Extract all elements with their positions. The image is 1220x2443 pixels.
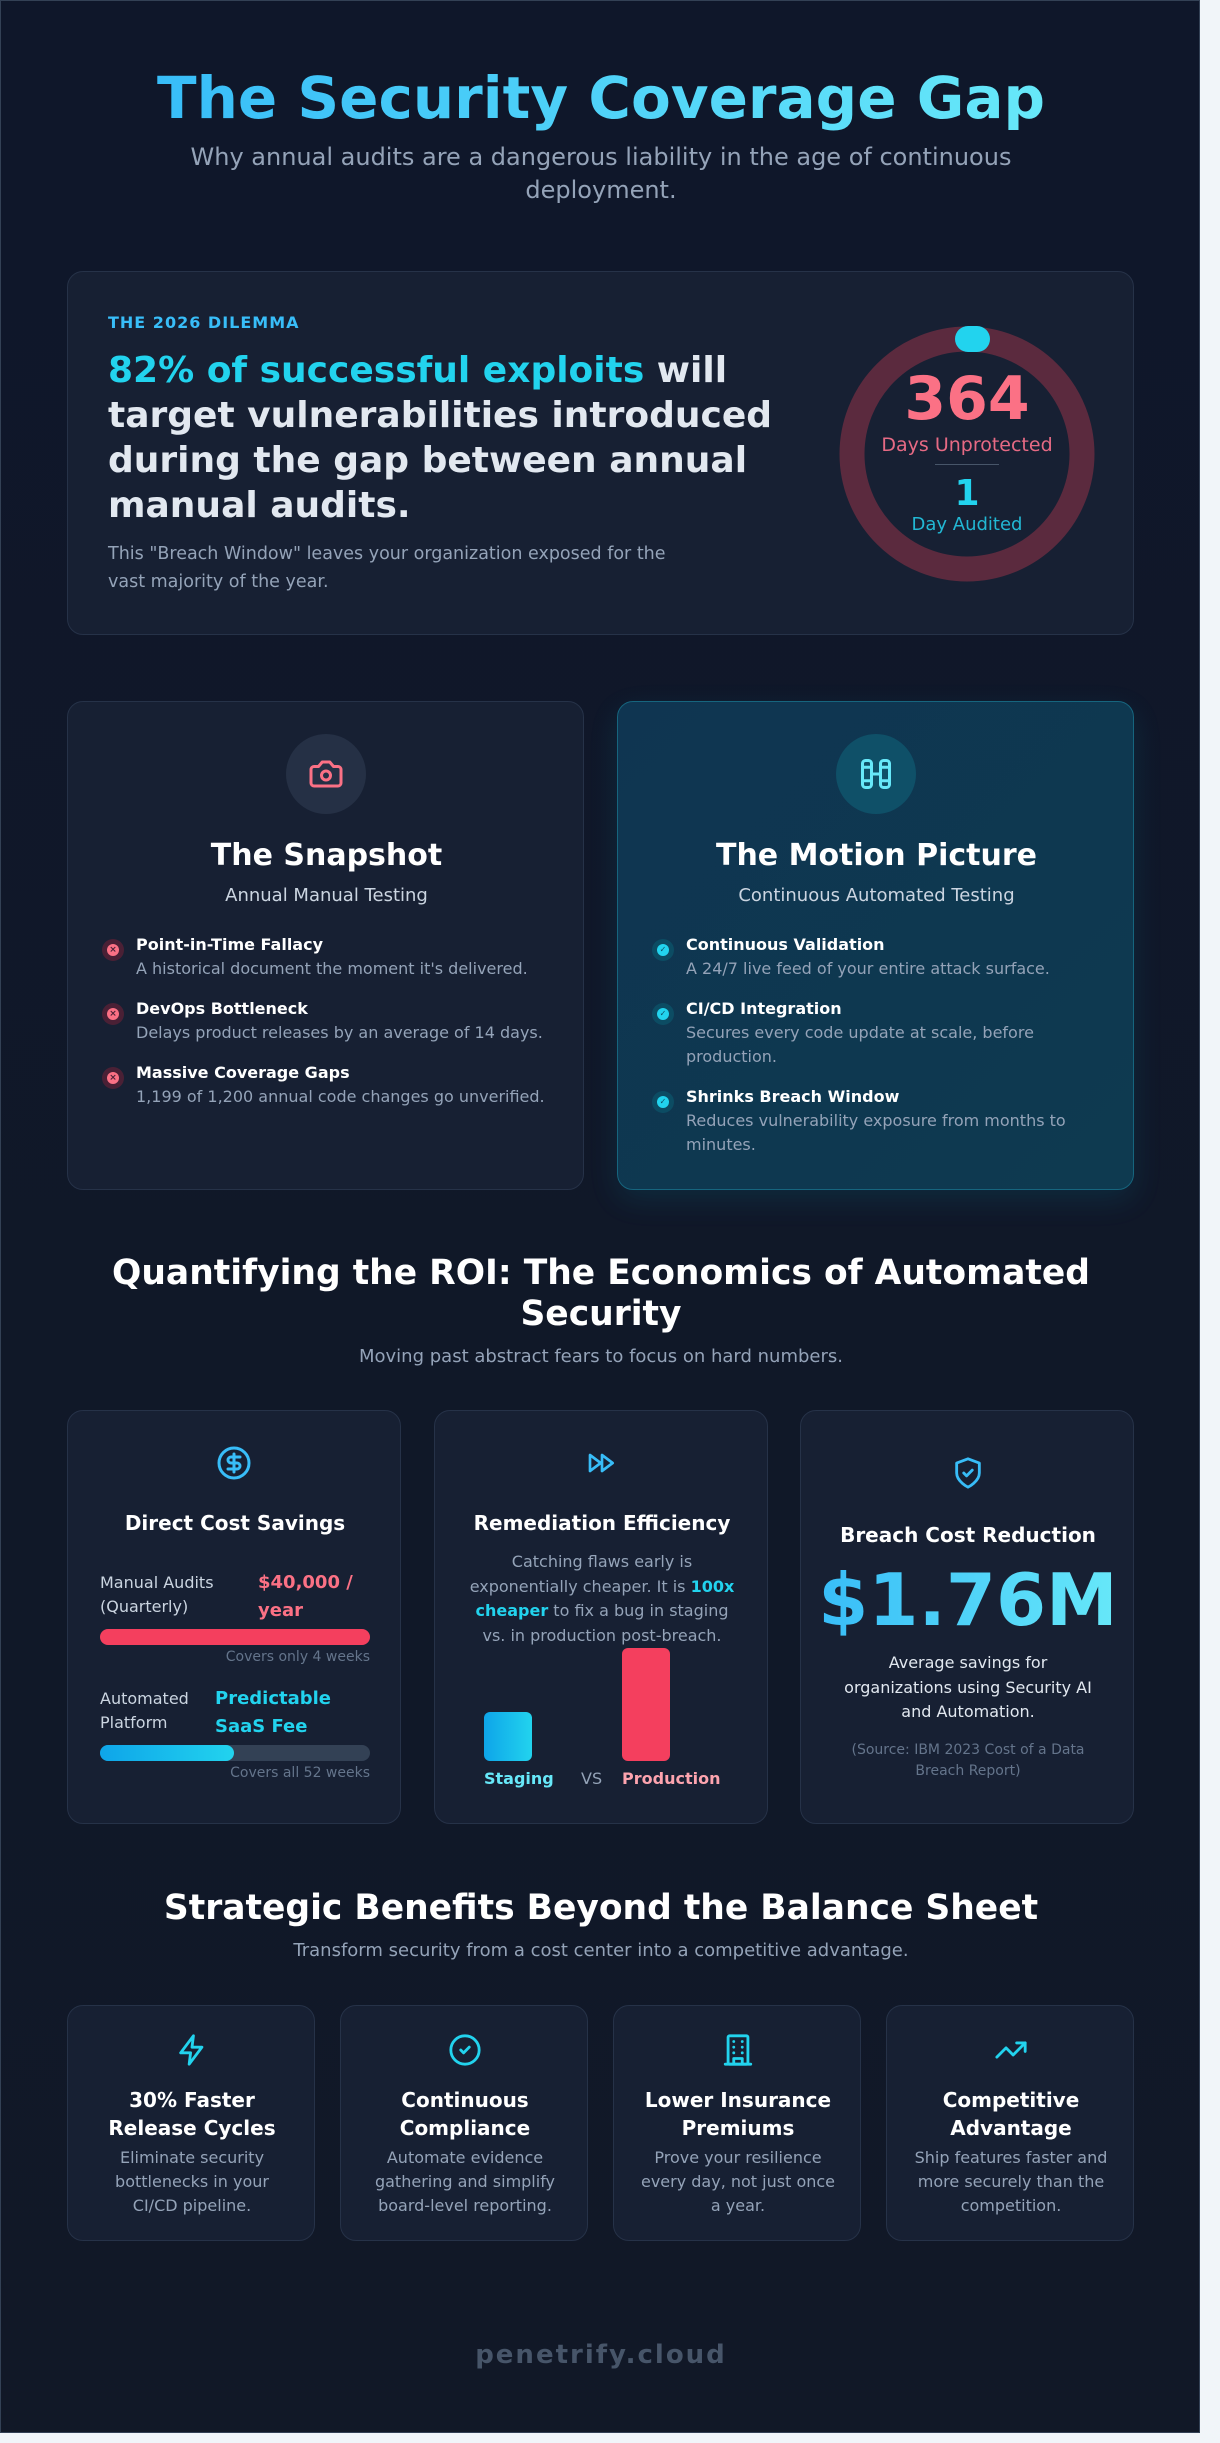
row: automated platform: [100, 1688, 370, 1781]
item 3: Reduces vulnerability exposure from months to minutes.: [686, 1111, 1066, 1154]
label production: Production: [622, 1769, 720, 1788]
eyebrow label: THE 2026 DILEMMA: [108, 313, 300, 332]
item 2: [102, 999, 543, 1042]
item 1: ×: [109, 945, 117, 955]
icon: film: [836, 734, 916, 814]
body text: This "Breach Window" leaves your organization exposed for the vast majority of the year.: [108, 544, 666, 592]
title: Lower Insurance Premiums: [645, 2088, 831, 2140]
icon: shield check: [955, 1457, 981, 1489]
icon: check circle: [449, 2034, 481, 2066]
row: manual audits: $40,000 / year: [258, 1572, 353, 1621]
label staging: Staging: [484, 1769, 554, 1788]
item 1: Point-in-Time Fallacy: [136, 935, 323, 954]
item 2: [652, 999, 1034, 1066]
icon: lightning: [179, 2034, 204, 2066]
title: Continuous Compliance: [400, 2088, 530, 2140]
heading: Direct Cost Savings: [125, 1511, 345, 1535]
stat 1: 1: [954, 473, 980, 514]
subtitle: Why annual audits are a dangerous liability in the age of continuous deployment.: [191, 143, 1011, 204]
heading: The Snapshot: [211, 838, 442, 873]
panel: hero dilemma: [67, 271, 1134, 635]
item 2: ✓: [660, 1009, 666, 1018]
row: automated platform: Predictable SaaS Fee: [215, 1688, 331, 1737]
row: manual audits: Manual Audits (Quarterly): [100, 1573, 214, 1616]
item 2: CI/CD Integration: [686, 999, 842, 1018]
item 3: Massive Coverage Gaps: [136, 1063, 350, 1082]
footer brand: penetrify.cloud: [475, 2340, 727, 2370]
item 2: ×: [109, 1009, 117, 1019]
subheading: Continuous Automated Testing: [738, 885, 1015, 906]
source note: (Source: IBM 2023 Cost of a Data Breach Report): [851, 1742, 1085, 1779]
row: automated platform: Covers all 52 weeks: [230, 1765, 370, 1781]
description: Ship features faster and more securely than the competition.: [915, 2148, 1107, 2215]
row: manual audits: Covers only 4 weeks: [226, 1649, 370, 1665]
description: Prove your resilience every day, not just once a year.: [641, 2148, 835, 2215]
list: continuous benefits: [652, 935, 1066, 1154]
panel: continuous compliance: [340, 2005, 588, 2241]
bar chart: staging vs production: [484, 1648, 720, 1788]
label days unprotected: Days Unprotected: [881, 434, 1053, 456]
item 1: [102, 935, 528, 978]
description: Automate evidence gathering and simplify board-level reporting.: [375, 2148, 555, 2215]
item 2: DevOps Bottleneck: [136, 999, 308, 1018]
subheading: ROI: Moving past abstract fears to focus on hard numbers.: [359, 1346, 843, 1367]
description: Average savings for organizations using Security AI and Automation.: [844, 1653, 1092, 1721]
item 3: [652, 1087, 1066, 1154]
panel: remediation efficiency: [434, 1410, 768, 1824]
icon: building: [724, 2034, 752, 2066]
item 2: Secures every code update at scale, before production.: [686, 1023, 1034, 1066]
bar: production: [622, 1648, 670, 1761]
panel: breach cost reduction: [800, 1410, 1134, 1824]
item 1: ✓: [660, 945, 666, 954]
item 3: ✓: [660, 1097, 666, 1106]
title: Competitive Advantage: [943, 2088, 1079, 2140]
stat 364: 364: [904, 364, 1030, 434]
panel: the snapshot: [67, 701, 584, 1190]
icon: camera: [286, 734, 366, 814]
big stat: $1.76M: [818, 1558, 1118, 1642]
item 1: [652, 935, 1050, 978]
heading: strategic benefits: Strategic Benefits Beyond the Balance Sheet: [164, 1888, 1038, 1928]
heading: The Motion Picture: [716, 838, 1037, 873]
item 1: A 24/7 live feed of your entire attack surface.: [686, 959, 1050, 978]
row: automated platform: Automated Platform: [100, 1689, 189, 1732]
icon: fast forward: [588, 1454, 614, 1472]
list: snapshot drawbacks: [102, 935, 545, 1106]
panel: lower insurance: [613, 2005, 861, 2241]
panel: direct cost savings: [67, 1410, 401, 1824]
row: manual audits: [100, 1572, 370, 1665]
bar: staging: [484, 1712, 532, 1761]
icon: trending up: [995, 2041, 1027, 2059]
item 3: Shrinks Breach Window: [686, 1087, 899, 1106]
panel: the motion picture: [617, 701, 1134, 1190]
item 1: A historical document the moment it's delivered.: [136, 959, 528, 978]
title: 30% Faster Release Cycles: [108, 2088, 276, 2140]
heading: ROI: Quantifying the ROI: The Economics of Automated Security: [112, 1253, 1090, 1334]
subheading: strategic benefits: Transform security from a cost center into a competitive advantage.: [293, 1940, 909, 1961]
item 2: Delays product releases by an average of 14 days.: [136, 1023, 543, 1042]
description: Catching flaws early is exponentially cheaper. It is 100x cheaper to fix a bug in staging vs. in production post-breach.: [470, 1552, 734, 1644]
heading: Breach Cost Reduction: [840, 1523, 1096, 1547]
panel: faster release: [67, 2005, 315, 2241]
title: The Security Coverage Gap: [157, 64, 1045, 132]
heading: Remediation Efficiency: [474, 1511, 730, 1535]
subheading: Annual Manual Testing: [225, 885, 428, 906]
item 3: ×: [109, 1073, 117, 1083]
icon: dollar circle: [218, 1446, 250, 1480]
headline: 82% of successful exploits will target vulnerabilities introduced during the gap between annual manual audits.: [108, 350, 772, 526]
panel: competitive advantage: [886, 2005, 1134, 2241]
bar chart: staging vs production: VS: [581, 1769, 602, 1788]
item 3: 1,199 of 1,200 annual code changes go unverified.: [136, 1087, 545, 1106]
item 3: [102, 1063, 545, 1106]
ring chart: [840, 326, 1094, 582]
label day audited: Day Audited: [912, 514, 1022, 535]
item 1: Continuous Validation: [686, 935, 885, 954]
description: Eliminate security bottlenecks in your CI/CD pipeline.: [115, 2148, 269, 2215]
